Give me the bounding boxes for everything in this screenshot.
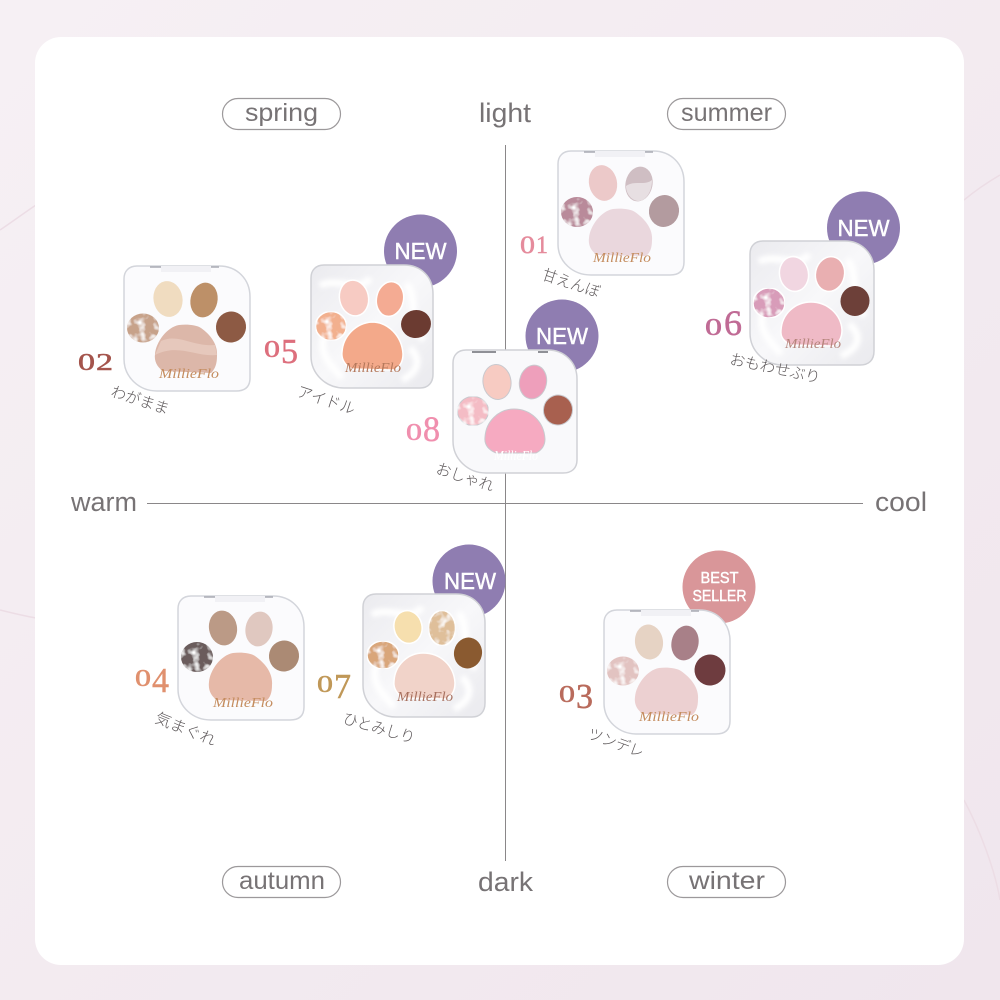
number 06: 6	[724, 303, 742, 343]
badge: NEW (06): NEW	[838, 215, 890, 241]
palette 02	[124, 266, 250, 391]
palette 05: MillieFlo	[344, 361, 401, 376]
palette 01: MillieFlo	[592, 251, 651, 266]
palette 06	[750, 241, 874, 365]
palette 04	[178, 596, 304, 720]
badge: BEST SELLER (03): SELLER	[692, 588, 746, 605]
number 03: 0	[559, 682, 575, 708]
number 05: 0	[264, 337, 280, 363]
number 06: 0	[705, 315, 722, 341]
number 07: 7	[334, 667, 351, 706]
badge: NEW (07): NEW	[444, 568, 496, 594]
number 06	[705, 303, 742, 343]
palette 06: MillieFlo	[784, 337, 841, 352]
axis label: warm: warm	[70, 487, 137, 517]
season pill: winter	[668, 866, 786, 898]
axis label: dark: dark	[478, 867, 534, 897]
label 06: おもわせぶり	[728, 351, 822, 387]
number 01	[520, 232, 548, 259]
badge: NEW (06)	[827, 192, 900, 264]
number 02: 2	[96, 350, 113, 376]
number 04: 0	[135, 666, 151, 692]
season pill: autumn: autumn	[239, 867, 325, 895]
palette 05	[311, 265, 433, 388]
number 07	[317, 667, 351, 706]
axis label: cool: cool	[875, 487, 927, 517]
palette 07: MillieFlo	[396, 690, 453, 705]
season pill: summer: summer	[681, 99, 772, 127]
palette 02: MillieFlo	[158, 367, 219, 382]
palette 07	[363, 594, 485, 717]
palette 03	[604, 610, 730, 734]
palette 03: MillieFlo	[638, 710, 699, 725]
number 07: 0	[317, 672, 333, 698]
season pill: autumn	[222, 866, 340, 898]
season pill: winter: winter	[688, 867, 765, 895]
badge: NEW (08)	[526, 300, 598, 372]
season pill: summer	[668, 98, 786, 130]
axis label: light: light	[479, 98, 532, 128]
number 05: 5	[281, 332, 298, 371]
label 07: ひとみしり	[341, 711, 417, 747]
badge: NEW (05)	[384, 214, 457, 288]
palette 01	[558, 151, 684, 275]
badge: NEW (07)	[432, 544, 506, 618]
number 01: 0	[520, 232, 535, 259]
label 02: わがまま	[109, 383, 171, 418]
badge: BEST SELLER (03): BEST	[700, 570, 739, 587]
number 02	[78, 350, 113, 376]
badge: NEW (05): NEW	[394, 238, 447, 264]
number 03: 3	[576, 677, 593, 716]
palette 08: MillieFlo	[493, 449, 538, 464]
number 08: 0	[406, 420, 422, 446]
number 04: 4	[152, 661, 169, 700]
number 04	[135, 661, 169, 700]
label 05: アイドル	[295, 384, 357, 418]
badge: BEST SELLER (03)	[682, 550, 756, 624]
horizontal axis	[147, 502, 863, 504]
number 03	[559, 677, 593, 716]
number 01: 1	[536, 232, 548, 259]
season pill: spring	[222, 98, 340, 130]
palette 04: MillieFlo	[212, 696, 273, 711]
badge: NEW (08): NEW	[536, 323, 588, 349]
number 02: 0	[78, 350, 95, 376]
number 08	[406, 409, 440, 449]
label 08: おしゃれ	[434, 461, 497, 495]
vertical axis	[504, 145, 506, 861]
palette 08	[453, 350, 577, 473]
season pill: spring: spring	[245, 99, 318, 127]
number 05	[264, 332, 298, 371]
label 03: ツンデレ	[586, 725, 646, 762]
label 04: 気まぐれ	[153, 709, 219, 750]
label 01: 甘えんぼ	[540, 266, 603, 301]
number 08: 8	[423, 409, 440, 449]
